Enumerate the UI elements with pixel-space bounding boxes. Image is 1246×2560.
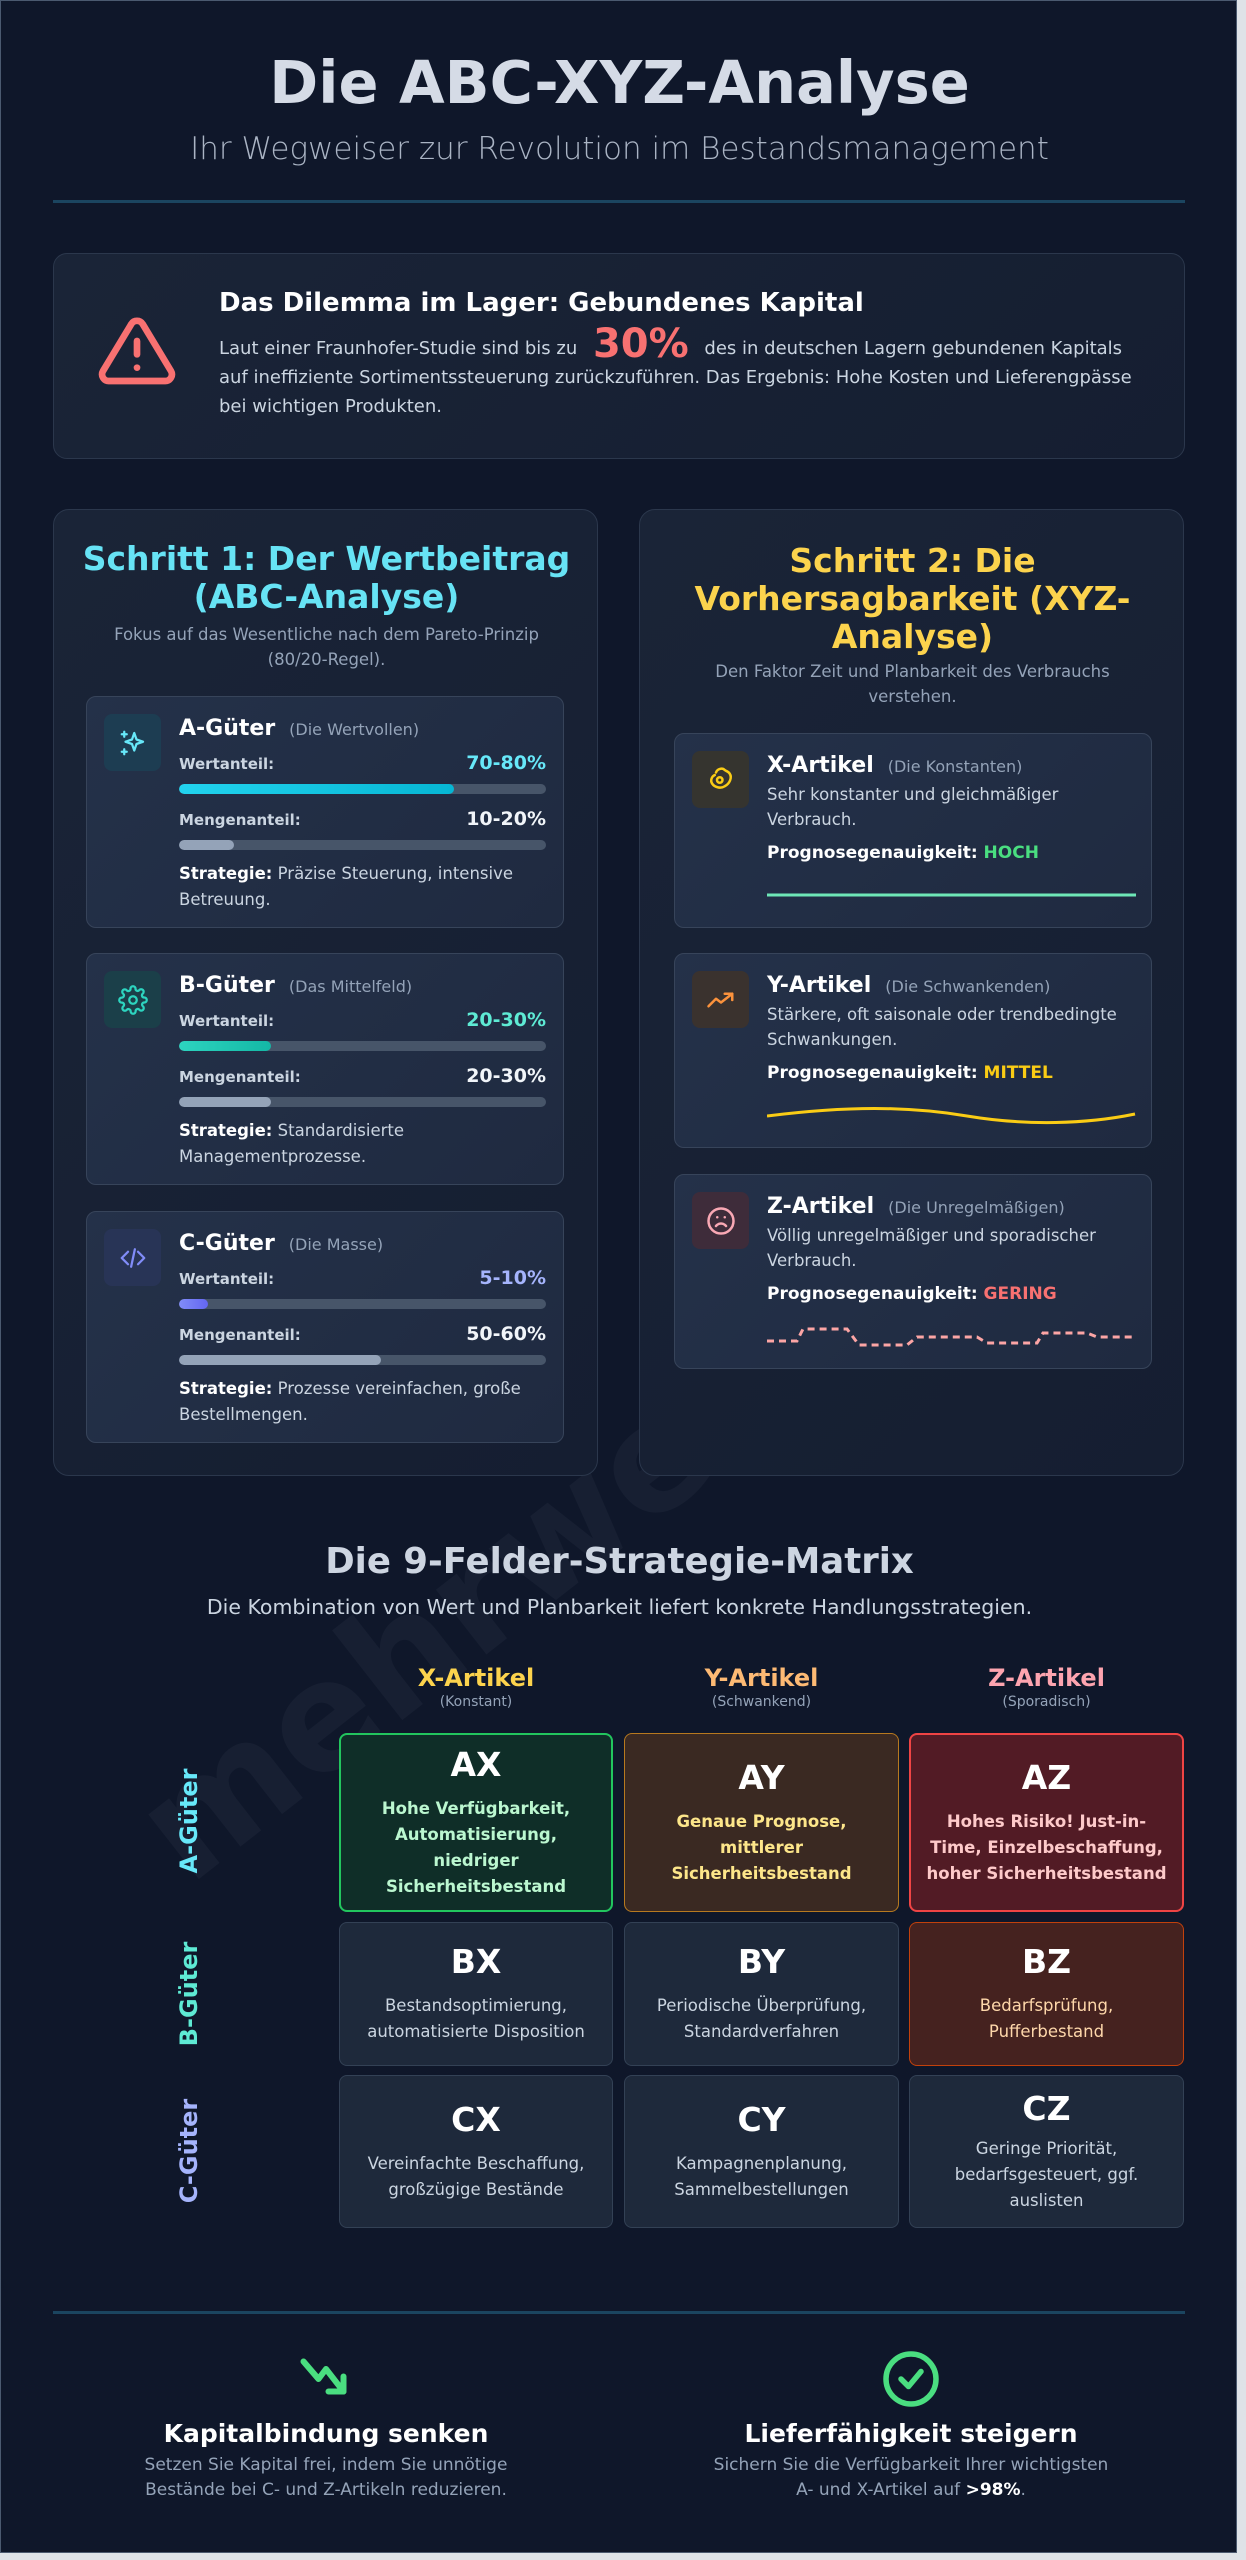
card: Y-Artikel: Prognosegenauigkeit: MITTEL (767, 1063, 1053, 1083)
benefit: Kapitalbindung: Kapitalbindung senken (164, 2419, 488, 2448)
cell: BX: Bestandsoptimierung, automatisierte Disposition (367, 1996, 585, 2041)
cell: AZ: Hohes Risiko! Just-in-Time, Einzelbeschaffung, hoher Sicherheitsbestand (926, 1812, 1166, 1882)
column header: Z: Z-Artikel (988, 1664, 1105, 1692)
cell: CY (624, 2075, 899, 2228)
card: A-Güter: 70-80% (466, 752, 546, 774)
cell: CY: Kampagnenplanung, Sammelbestellungen (674, 2154, 849, 2198)
card: Z-Artikel (674, 1174, 1152, 1369)
cell: BY: BY (738, 1942, 785, 1981)
card: C-Güter: Wertanteil: (179, 1270, 274, 1288)
cell: AX (339, 1733, 613, 1912)
chart: erratic (767, 1328, 1132, 1346)
column header: Y: (Schwankend) (712, 1694, 811, 1710)
cell: CX (339, 2075, 613, 2228)
row label: C: C-Güter (175, 2099, 203, 2203)
card: Y-Artikel: Y-Artikel (Die Schwankenden) (767, 973, 1050, 998)
cell: CZ: Geringe Priorität, bedarfsgesteuert, ggf. auslisten (955, 2138, 1138, 2210)
panel: dilemma (53, 253, 1185, 459)
card: C-Güter: 5-10% (479, 1267, 546, 1289)
heading: Schritt 1 (83, 539, 570, 616)
icon: trend down (300, 2358, 346, 2394)
card: C-Güter: Strategie: Prozesse vereinfachen, große Bestellmengen. (179, 1379, 521, 1424)
cell: CX: CX (451, 2100, 501, 2138)
column header: Z (988, 1664, 1105, 1710)
heading: dilemma: Das Dilemma im Lager: Gebundenes Kapital (219, 288, 864, 318)
cell: CZ: CZ (1022, 2088, 1071, 2128)
card: C-Güter: 50-60% (466, 1323, 546, 1345)
card: Y-Artikel: Stärkere, oft saisonale oder trendbedingte Schwankungen. (767, 1005, 1117, 1049)
card: Z-Artikel: Z-Artikel (Die Unregelmäßigen) (767, 1194, 1065, 1219)
chart: wave (767, 1107, 1136, 1124)
panel: XYZ (639, 509, 1184, 1476)
cell: CX: Vereinfachte Beschaffung, großzügige Bestände (368, 2154, 584, 2198)
benefit: Kapitalbindung: Bestände bei C- und Z-Artikeln reduzieren. (145, 2480, 507, 2500)
benefit: Lieferfähigkeit: Lieferfähigkeit steigern (744, 2419, 1078, 2448)
cell: AX: Hohe Verfügbarkeit, Automatisierung, niedriger Sicherheitsbestand (382, 1798, 570, 1896)
heading: Schritt 1: Schritt 1: Der Wertbeitrag (83, 539, 570, 578)
benefit: Kapitalbindung: Setzen Sie Kapital frei, indem Sie unnötige (145, 2455, 507, 2475)
column header: Y (704, 1664, 818, 1710)
icon: check circle (883, 2351, 939, 2407)
heading: matrix: Die 9-Felder-Strategie-Matrix (325, 1541, 914, 1582)
cell: AY: Genaue Prognose, mittlerer Sicherheitsbestand (671, 1812, 852, 1882)
cell: AY (624, 1733, 899, 1912)
benefit: Lieferfähigkeit: Sichern Sie die Verfügbarkeit Ihrer wichtigsten (714, 2455, 1108, 2475)
cell: CY: CY (737, 2100, 786, 2138)
row label: A: A-Güter (175, 1769, 203, 1873)
card: B-Güter: Strategie: Standardisierte Managementprozesse. (179, 1121, 404, 1166)
card: Z-Artikel: Prognosegenauigkeit: GERING (767, 1284, 1057, 1304)
card: X-Artikel: Sehr konstanter und gleichmäßiger Verbrauch. (767, 785, 1058, 829)
cell: AY: AY (738, 1758, 785, 1796)
row label: B: B-Güter (175, 1942, 203, 2046)
column header: X: (Konstant) (440, 1694, 512, 1710)
benefit: Lieferfähigkeit (714, 2351, 1108, 2500)
column header: Y: Y-Artikel (705, 1664, 818, 1692)
panel: ABC (53, 509, 598, 1476)
watermark: mehrwertsemi (104, 1025, 1175, 1915)
card: C-Güter: C-Güter (Die Masse) (179, 1231, 383, 1256)
cell: BX (339, 1922, 613, 2066)
card: A-Güter: Mengenanteil: (179, 811, 301, 829)
card: C-Güter (86, 1211, 564, 1443)
title: Die ABC-XYZ-Analyse (269, 48, 970, 117)
card: B-Güter: B-Güter (Das Mittelfeld) (179, 973, 412, 998)
column header: X: X-Artikel (418, 1664, 534, 1692)
icon: sparkles (104, 714, 161, 771)
card: Z-Artikel: Völlig unregelmäßiger und sporadischer Verbrauch. (767, 1226, 1096, 1270)
card: Y-Artikel (674, 953, 1152, 1148)
cell: AZ (909, 1733, 1184, 1912)
subtitle: Pareto: Fokus auf das Wesentliche nach dem Pareto-Prinzip (80/20-Regel). (114, 625, 539, 669)
card: A-Güter: Strategie: Präzise Steuerung, intensive Betreuung. (179, 864, 513, 909)
cell: BY: Periodische Überprüfung, Standardverfahren (657, 1996, 866, 2041)
cell: AX: AX (450, 1744, 501, 1784)
column header: X (418, 1664, 534, 1710)
card: A-Güter (86, 696, 564, 928)
card: A-Güter: Wertanteil: (179, 755, 274, 773)
subtitle: matrix: Die Kombination von Wert und Planbarkeit liefert konkrete Handlungsstrategien. (207, 1595, 1032, 1619)
cell: BZ (909, 1922, 1184, 2066)
card: B-Güter: 20-30% (466, 1009, 546, 1031)
text: dilemma: Laut einer Fraunhofer-Studie sind bis zu 30% des in deutschen Lagern gebundenen Kapitals auf ineffiziente Sortimentssteuerung zurückzuführen. Das Ergebnis: Hohe Kosten und Lieferengpässe bei wichtigen Produkten. (219, 321, 1132, 417)
benefit: Lieferfähigkeit: A- und X-Artikel auf >98%. (796, 2480, 1026, 2500)
subtitle: Zeit: Den Faktor Zeit und Planbarkeit des Verbrauchs verstehen. (715, 662, 1110, 706)
cell: BZ: Bedarfsprüfung, Pufferbestand (980, 1996, 1113, 2041)
card: C-Güter: Mengenanteil: (179, 1326, 301, 1344)
card: X-Artikel (674, 733, 1152, 928)
chart: constant line (767, 894, 1136, 896)
card: B-Güter (86, 953, 564, 1185)
card: A-Güter: 10-20% (466, 808, 546, 830)
cell: BZ: BZ (1022, 1942, 1071, 1981)
card: B-Güter: Mengenanteil: (179, 1068, 301, 1086)
cell: BY (624, 1922, 899, 2066)
card: B-Güter: Wertanteil: (179, 1012, 274, 1030)
icon: code (104, 1229, 161, 1286)
cell: BX: BX (451, 1942, 501, 1981)
icon: gear (104, 971, 161, 1028)
card: A-Güter: A-Güter (Die Wertvollen) (179, 716, 419, 741)
subtitle: Ihr Wegweiser zur Revolution im Bestandsmanagement (190, 131, 1049, 167)
icon: sad face (692, 1192, 749, 1249)
icon: warning (98, 318, 176, 384)
cell: AZ: AZ (1022, 1758, 1071, 1796)
card: X-Artikel: X-Artikel (Die Konstanten) (767, 753, 1022, 778)
benefit: Kapitalbindung (145, 2358, 507, 2500)
heading: Schritt 1: (ABC-Analyse) (194, 577, 459, 616)
card: X-Artikel: Prognosegenauigkeit: HOCH (767, 843, 1039, 863)
heading: Schritt 2: Schritt 2: Die Vorhersagbarkeit (XYZ-Analyse) (694, 541, 1130, 656)
column header: Z: (Sporadisch) (1002, 1694, 1091, 1710)
icon: X (692, 751, 749, 808)
cell: CZ (909, 2075, 1184, 2228)
icon: trending up (692, 971, 749, 1028)
card: B-Güter: 20-30% (466, 1065, 546, 1087)
